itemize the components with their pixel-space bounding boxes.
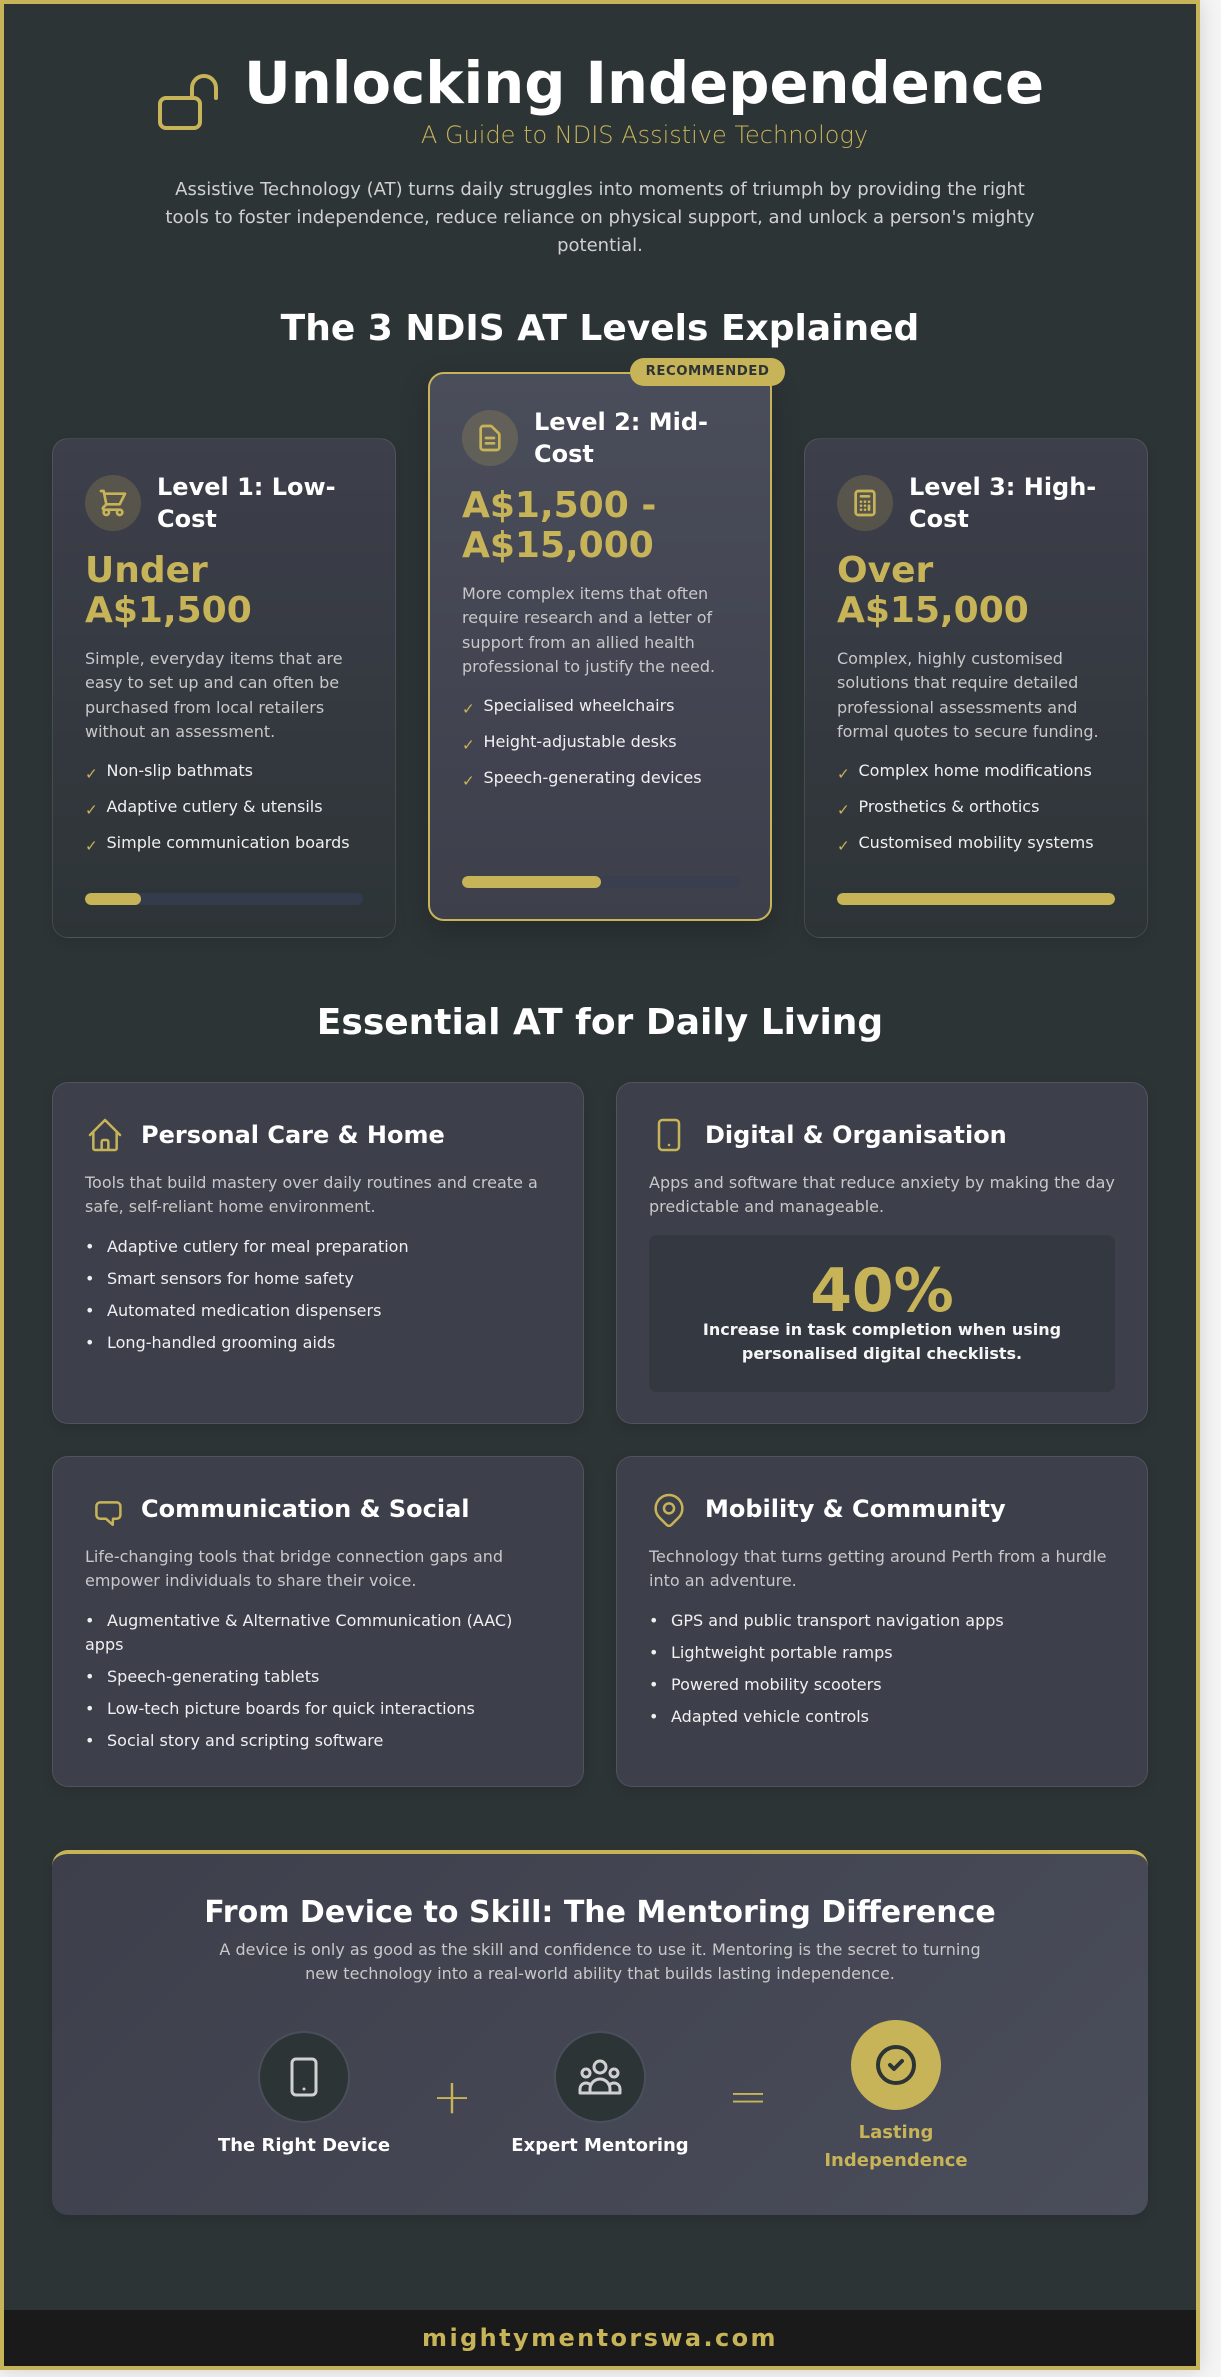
level 3 item: Customised mobility systems [858,833,1094,852]
level 3 description: solutions that require detailed [837,673,1078,692]
description: Apps and software that reduce anxiety by making the day [649,1173,1115,1192]
step label: Independence [824,2150,968,2171]
description: safe, self-reliant home environment. [85,1197,376,1216]
panel: mobility [616,1456,1148,1786]
list: • [85,1237,94,1256]
intro text: tools to foster independence, reduce reliance on physical support, and unlock a person's mighty [165,207,1035,228]
list: • [85,1667,94,1686]
level 1 heading [157,473,336,533]
icon: phone [658,1118,680,1152]
step label: Lasting [859,2122,933,2142]
step label [824,2122,968,2171]
description [84,1173,538,1216]
level 3 price: Over [837,550,933,591]
list: Speech-generating tablets [107,1667,319,1686]
step label: The Right Device [218,2135,390,2156]
level 1 description: without an assessment. [85,722,275,741]
level 1 price: A$1,500 [85,590,252,631]
description [85,1547,503,1590]
level 3 price [837,550,1029,631]
website: mightymentorswa.com [422,2324,778,2352]
level 1 item: Simple communication boards [106,833,350,852]
level 2 item: Speech-generating devices [484,768,702,787]
description: Tools that build mastery over daily routines and create a [85,1173,538,1192]
stat caption: Increase in task completion when using [703,1320,1061,1339]
level 2 price [462,485,656,566]
step: lasting independence [824,2020,968,2171]
level 2 progress bar [462,876,740,888]
level 3 description: Complex, highly customised [837,649,1063,668]
level 2 description: More complex items that often [462,584,708,603]
description [648,1547,1107,1590]
level 2 heading: Level 2: Mid- [534,408,708,436]
intro text: potential. [557,235,643,256]
level 2 price: A$15,000 [462,525,654,566]
level 1 item: ✓ [85,765,98,783]
stat box [649,1235,1115,1392]
list: • [649,1643,658,1662]
step: expert mentoring [511,2031,689,2156]
level 1 item: Adaptive cutlery & utensils [106,797,323,816]
description: Technology that turns getting around Perth from a hurdle [649,1547,1107,1566]
list: Lightweight portable ramps [671,1643,893,1662]
list: • [85,1269,94,1288]
description: predictable and manageable. [649,1197,884,1216]
icon: shopping cart [85,475,141,531]
icon: device [258,2031,350,2123]
level 3 price: A$15,000 [837,590,1029,631]
level 2 description: require research and a letter of [462,608,712,627]
recommended badge [630,358,785,386]
icon: home [88,1118,122,1152]
level 1 description: easy to set up and can often be [85,673,339,692]
level 1 heading: Cost [157,505,217,533]
intro text: Assistive Technology (AT) turns daily struggles into moments of triumph by providing the right [175,179,1025,200]
list [85,1611,512,1750]
heading: daily living: Essential AT for Daily Living [317,1002,883,1042]
mentoring description: new technology into a real-world ability that builds lasting independence. [305,1964,895,1983]
step label: Expert Mentoring [511,2135,689,2156]
intro text [165,179,1035,256]
level 2 price: A$1,500 - [462,485,656,526]
heading: Communication & Social [141,1494,470,1522]
title: Unlocking Independence [244,50,1044,116]
list: GPS and public transport navigation apps [671,1611,1004,1630]
level 3 item: Prosthetics & orthotics [858,797,1039,816]
level 3 item: ✓ [837,837,850,855]
stat number: 40% [810,1256,954,1326]
mentoring description [219,1940,981,1983]
icon: map pin [654,1494,684,1527]
icon: open padlock [158,74,218,130]
step: the right device [218,2031,390,2156]
level 1 price [85,550,252,631]
list: Adapted vehicle controls [671,1707,869,1726]
list: Social story and scripting software [107,1731,383,1750]
list [649,1611,1004,1726]
recommended badge: RECOMMENDED [646,364,769,379]
level 2 item: ✓ [462,772,475,790]
panel: mentoring difference [52,1850,1148,2215]
panel: level 3 [804,438,1148,938]
level 2 heading [534,408,708,468]
mentoring description: A device is only as good as the skill and confidence to use it. Mentoring is the secret to turning [219,1940,981,1959]
list: Low-tech picture boards for quick interactions [107,1699,475,1718]
equals sign: = [728,2068,768,2124]
level 1 description: purchased from local retailers [85,698,324,717]
icon: group [554,2031,646,2123]
description: into an adventure. [649,1571,797,1590]
description [649,1173,1115,1216]
level 2 item: ✓ [462,736,475,754]
list: Adaptive cutlery for meal preparation [107,1237,409,1256]
list: Augmentative & Alternative Communication (AAC) apps [85,1611,512,1654]
level 1 price: Under [85,550,208,591]
icon: speech bubble [95,1501,122,1526]
panel: personal care [52,1082,584,1424]
level 1 item: ✓ [85,837,98,855]
list: • [85,1611,94,1630]
level 1 item: ✓ [85,801,98,819]
level 3 progress bar [837,893,1115,905]
panel: communication [52,1456,584,1786]
level 1 heading: Level 1: Low- [157,473,336,501]
panel: level 2 [428,372,772,921]
level 2 description: professional to justify the need. [462,657,715,676]
icon: calculator [837,475,893,531]
icon: document [462,410,518,466]
list: • [85,1333,94,1352]
stat caption: personalised digital checklists. [742,1344,1022,1363]
stat caption [703,1320,1061,1363]
level 2 item: Height-adjustable desks [484,732,677,751]
level 3 item: ✓ [837,765,850,783]
level 2 item: ✓ [462,700,475,718]
list: Smart sensors for home safety [107,1269,354,1288]
list: • [85,1731,94,1750]
list: Automated medication dispensers [107,1301,381,1320]
footer [4,2310,1196,2366]
level 1 description: Simple, everyday items that are [85,649,343,668]
icon: check circle [851,2020,941,2110]
list: • [85,1699,94,1718]
level 2 description: support from an allied health [462,633,695,652]
panel: level 1 [52,438,396,938]
level 2 description [462,584,715,676]
subtitle: A Guide to NDIS Assistive Technology [421,121,868,149]
level 3 heading: Level 3: High- [909,473,1096,501]
level 3 item: Complex home modifications [858,761,1092,780]
level 2 item: Specialised wheelchairs [484,696,674,715]
list: • [649,1707,658,1726]
plus sign: + [432,2068,472,2124]
level 1 progress bar [85,893,363,905]
heading: Mobility & Community [705,1494,1006,1522]
level 3 heading [909,473,1096,533]
mentoring heading: From Device to Skill: The Mentoring Difference [204,1894,996,1930]
description: Life-changing tools that bridge connection gaps and [85,1547,503,1566]
level 1 description [85,649,343,741]
level 1 item: Non-slip bathmats [106,761,253,780]
list: • [649,1675,658,1694]
list: • [649,1611,658,1630]
list: • [85,1301,94,1320]
level 3 description: formal quotes to secure funding. [837,722,1099,741]
level 3 heading: Cost [909,505,969,533]
list: Long-handled grooming aids [107,1333,335,1352]
heading: Digital & Organisation [705,1120,1007,1148]
level 2 heading: Cost [534,440,594,468]
panel: digital [616,1082,1148,1424]
heading: Personal Care & Home [141,1120,445,1148]
level 3 description [837,649,1099,741]
list: Powered mobility scooters [671,1675,882,1694]
level 3 item: ✓ [837,801,850,819]
description: empower individuals to share their voice. [85,1571,416,1590]
heading: levels: The 3 NDIS AT Levels Explained [281,308,919,348]
level 3 description: professional assessments and [837,698,1077,717]
list [85,1237,409,1352]
